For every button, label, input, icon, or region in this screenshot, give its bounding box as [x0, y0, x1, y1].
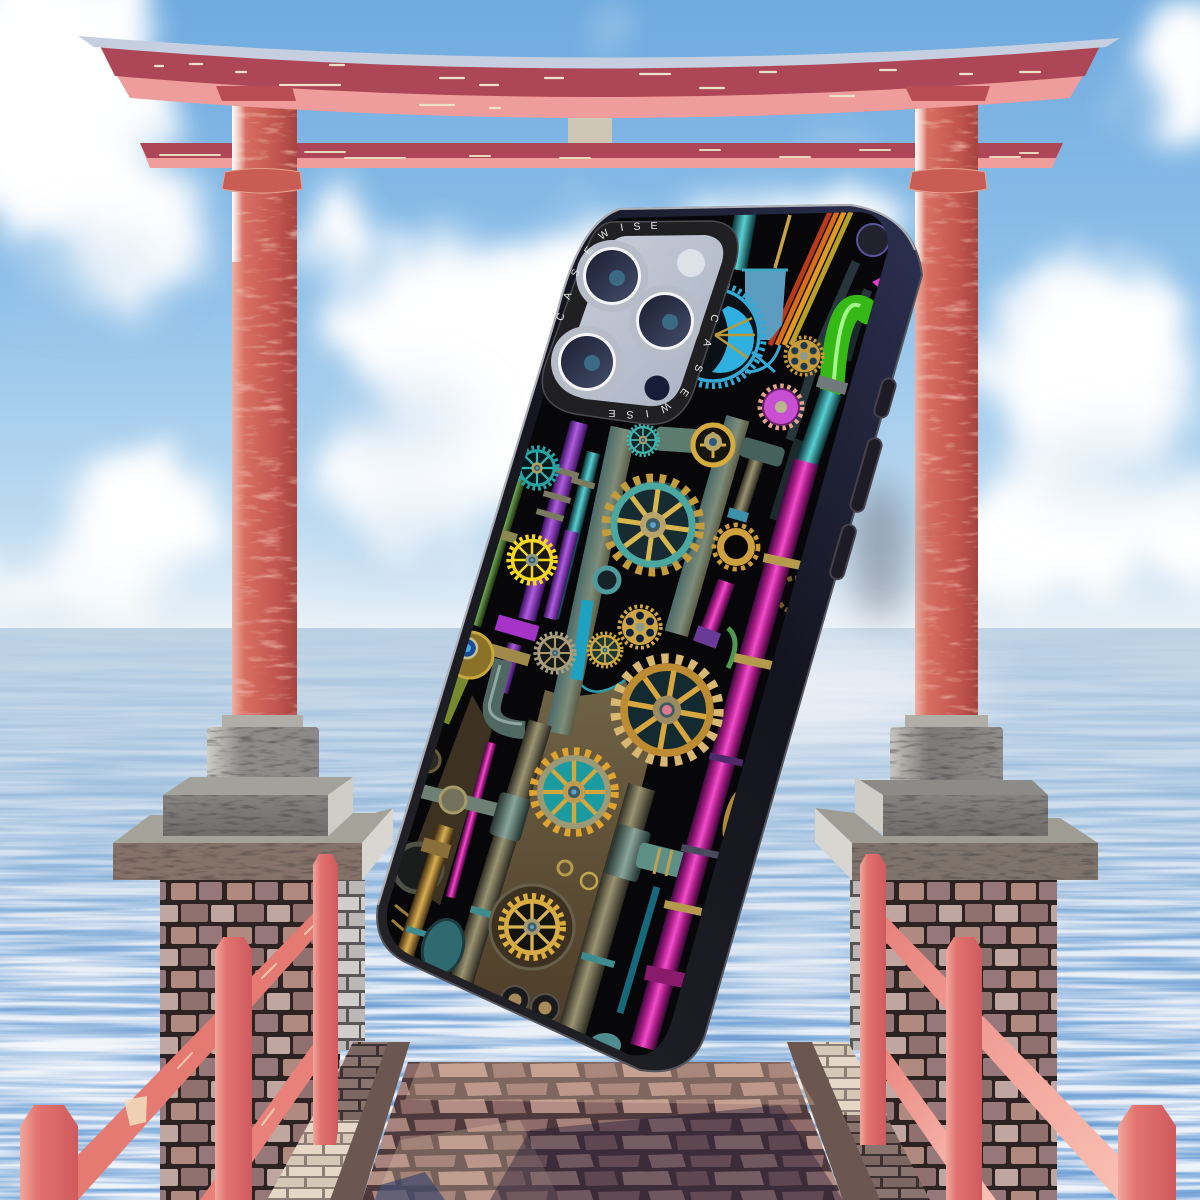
cloud shading — [25, 242, 1190, 568]
brand text around ring: E — [608, 407, 616, 419]
left curb — [267, 1042, 410, 1200]
sunlight and shadow on path — [405, 1062, 815, 1105]
central plate — [472, 680, 655, 1038]
purple pipe — [518, 420, 588, 622]
teal upper pipe — [796, 388, 842, 468]
brand text around ring: I — [619, 222, 624, 234]
brand text around ring: E — [650, 220, 658, 232]
camera module — [542, 220, 738, 424]
silver top lip — [378, 205, 915, 905]
gold holes gear — [785, 337, 823, 375]
pipe B — [557, 783, 655, 1041]
hole gear centre — [619, 606, 661, 648]
yellow gear — [508, 536, 556, 584]
grey pipe — [731, 457, 764, 519]
teal drum — [416, 915, 470, 979]
teal small gear — [627, 424, 659, 456]
elbow pipe — [492, 660, 525, 730]
brand text around ring: I — [645, 407, 650, 419]
flash — [677, 249, 705, 277]
sky background — [0, 0, 1200, 630]
pipe bands — [406, 906, 615, 968]
gold left pipe — [395, 824, 455, 962]
teal purple pipe — [557, 451, 600, 619]
left plate strip — [546, 426, 636, 736]
right plate strip — [665, 415, 749, 637]
purple lower section — [503, 642, 522, 694]
brand text around ring: A — [561, 291, 575, 301]
cyan channel — [570, 600, 594, 680]
pipe A — [448, 720, 552, 990]
lower rail — [200, 1025, 334, 1200]
right railing — [860, 854, 1176, 1200]
blue gear top — [662, 284, 780, 386]
brand text around ring: S — [633, 221, 641, 233]
right edge machinery — [680, 578, 812, 1025]
brand text around ring — [554, 220, 721, 420]
magenta pipe rings — [644, 553, 802, 988]
phone shadow haze — [852, 480, 908, 620]
lower rail — [862, 1025, 996, 1200]
short magenta pipe — [699, 579, 735, 637]
green elbow pipe — [832, 307, 868, 385]
lower left brown wall — [418, 695, 492, 905]
top teal pipe — [732, 214, 756, 271]
small teal gear centre — [595, 568, 619, 592]
brand text around ring: E — [582, 245, 596, 257]
torii centre strut — [568, 104, 612, 144]
brand text around ring: A — [700, 338, 714, 348]
horizontal pipe — [420, 784, 498, 816]
bottom teal fitting — [589, 1033, 621, 1057]
lower green pipe — [443, 665, 468, 722]
large magenta pipe — [630, 458, 819, 1051]
ring gear — [714, 525, 758, 569]
lens 2 — [629, 285, 701, 357]
fitting A — [489, 791, 531, 843]
sensor — [644, 376, 670, 400]
brand text around ring: C — [554, 311, 568, 322]
lower left dark machinery — [392, 748, 442, 940]
brand text around ring: C — [707, 313, 721, 324]
torii lower beam — [140, 143, 1063, 168]
brand text around ring: W — [596, 227, 611, 243]
magenta gear — [760, 386, 802, 428]
right stone base — [815, 715, 1098, 1200]
bottom knobs — [501, 986, 559, 1022]
brand text around ring: W — [658, 399, 673, 415]
upper rail — [58, 896, 330, 1200]
fitting B — [604, 823, 652, 883]
pipe rings — [536, 465, 595, 522]
teal gear left — [516, 447, 558, 489]
brand text around ring: E — [677, 386, 691, 398]
blue machine plate — [745, 270, 786, 340]
thin teal pipe — [620, 887, 657, 1013]
lens 1 — [576, 240, 648, 312]
gold blue fitting — [447, 632, 493, 678]
magenta pipe B — [445, 741, 497, 899]
clouds — [0, 0, 1200, 610]
bottom gold gear — [490, 885, 574, 969]
lens 3 — [551, 326, 623, 398]
thin gold rod — [775, 215, 790, 268]
right curb — [787, 1042, 930, 1200]
teal gold gear — [533, 751, 615, 833]
plate small rings — [558, 861, 597, 889]
horizontal cylinder — [655, 426, 705, 454]
brand text around ring: S — [626, 408, 634, 420]
phone case — [370, 200, 922, 1071]
rainbow streak pipes — [770, 212, 851, 345]
side buttons — [829, 377, 897, 581]
left railing — [20, 854, 338, 1200]
gold arc gear — [693, 425, 733, 465]
left pillar — [222, 100, 302, 720]
torii top beam — [78, 36, 1120, 118]
left stone base — [113, 715, 393, 1200]
big gold teal gear — [600, 472, 706, 578]
upper rail — [866, 896, 1138, 1200]
large gold gear — [607, 650, 727, 770]
phone body — [377, 205, 922, 1071]
purple collar — [495, 615, 539, 641]
small gold gear — [588, 633, 622, 667]
green yellow pipe — [474, 476, 525, 628]
panel behind large gear — [611, 481, 699, 569]
dark top right machinery — [775, 224, 889, 540]
brand text around ring: S — [691, 363, 705, 373]
silver gear — [535, 633, 575, 673]
right pillar — [909, 100, 987, 720]
case artwork: gears and pipes — [370, 200, 900, 1070]
sea — [0, 628, 1200, 1200]
plate teal edge — [582, 679, 626, 693]
stone path — [267, 1042, 930, 1200]
brand text around ring: S — [569, 267, 583, 278]
